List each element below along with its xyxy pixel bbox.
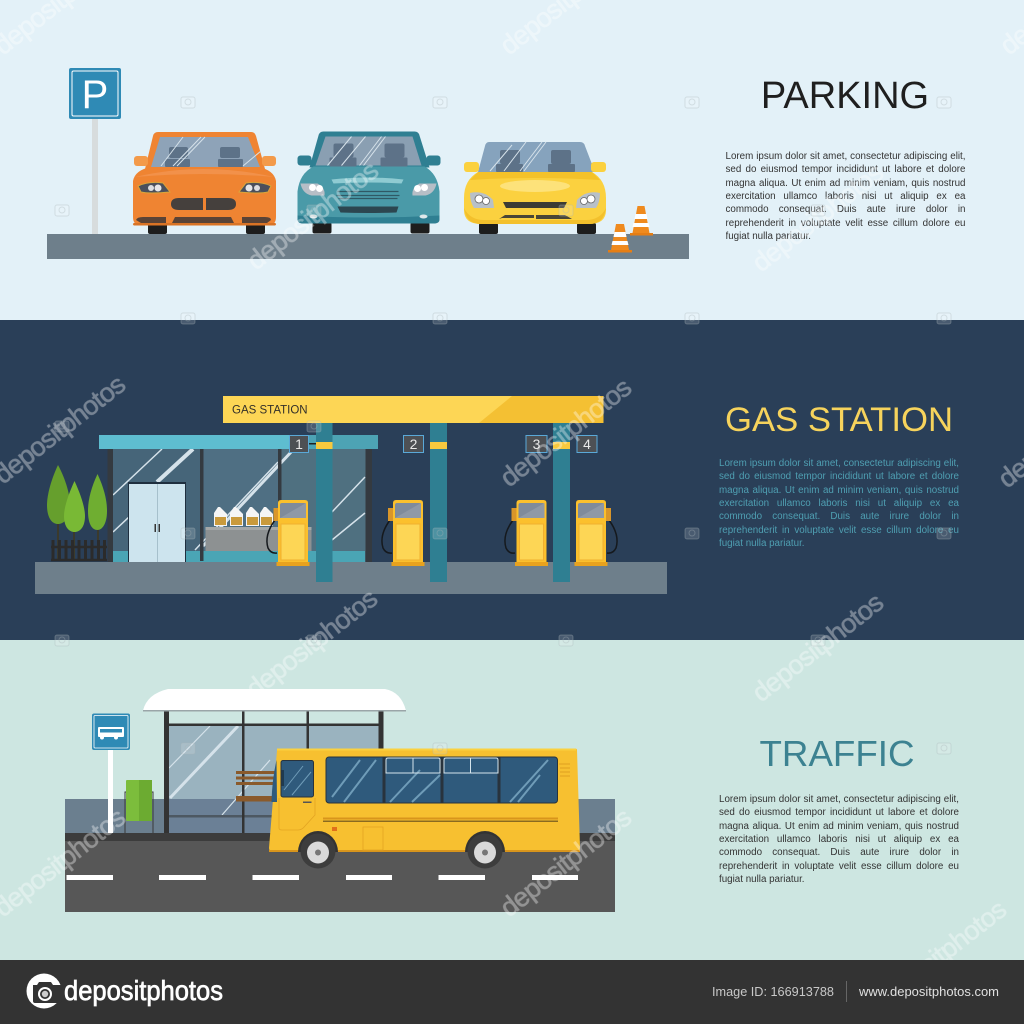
canopy sign <box>223 396 604 423</box>
icon: bus stop sign <box>92 714 130 833</box>
icon: shop building <box>99 435 378 562</box>
text block: traffic description: magna aliqua. Ut enim ad minim veniam, quis nostrud <box>719 821 959 832</box>
icon: green bin <box>125 780 153 833</box>
image id: Image ID: 166913788 <box>712 984 834 999</box>
watermarks: depositphotos <box>746 587 889 708</box>
text block: traffic description: reprehenderit in voluptate velit esse cillum dolore eu <box>719 861 959 872</box>
watermarks: depositphotos <box>746 157 889 278</box>
text block: traffic description <box>719 793 961 889</box>
text block: gas station description <box>719 457 961 553</box>
oil bottles <box>214 507 273 526</box>
pump number badges: 3 <box>533 436 541 452</box>
watermarks: depositphotos <box>241 155 384 276</box>
panel: parking <box>0 0 1024 320</box>
icon: orange car <box>133 132 276 234</box>
pump number badges <box>290 436 597 452</box>
watermark camera marks <box>55 97 951 754</box>
text block: parking description <box>726 150 968 246</box>
text block: parking description: fugiat nulla pariatur. <box>726 231 811 242</box>
text block: traffic description: sed do eiusmod tempor incididunt ut labore et dolore <box>719 807 959 818</box>
icon: traffic cones <box>608 206 653 252</box>
divider <box>846 981 847 1002</box>
text block: traffic description: exercitation ullamco laboris nisi ut aliquip ex ea <box>719 834 959 845</box>
icon: pump 4 <box>574 500 617 566</box>
icon: bus shelter <box>143 689 406 833</box>
text block: traffic description: fugiat nulla pariatur. <box>719 874 805 885</box>
icon: yellow car <box>464 142 606 234</box>
footer bar <box>0 960 1024 1024</box>
text block: parking description: Lorem ipsum dolor sit amet, consectetur adipiscing elit, <box>726 151 966 162</box>
wheels <box>298 831 505 868</box>
text block: gas station description: magna aliqua. Ut enim ad minim veniam, quis nostrud <box>719 485 959 496</box>
ground: station forecourt <box>35 562 667 594</box>
road: parking ground <box>47 234 689 259</box>
logo wordmark: depositphotos <box>64 975 223 1006</box>
icon: pump 2 <box>382 500 424 566</box>
text block: parking description: reprehenderit in voluptate velit esse cillum dolore eu <box>726 218 966 229</box>
watermarks: depositphotos <box>240 583 383 704</box>
pump number badges: 1 <box>295 436 303 452</box>
pump number badges: 2 <box>410 436 418 452</box>
panel: traffic <box>0 640 1024 960</box>
road with lane markings <box>65 833 615 912</box>
panel: gas station <box>0 320 1024 640</box>
canopy sign: GAS STATION <box>232 404 308 416</box>
icon: trees and fence <box>47 465 128 561</box>
sidewalk wall <box>65 799 615 833</box>
text block: traffic description: commodo consequat. Duis aute irure dolor in <box>719 847 959 858</box>
pump number badges: 4 <box>583 436 591 452</box>
text block: parking description: sed do eiusmod tempor incididunt ut labore et dolore <box>726 164 966 175</box>
heading: traffic: TRAFFIC <box>760 733 914 774</box>
text block: traffic description: Lorem ipsum dolor sit amet, consectetur adipiscing elit, <box>719 794 959 805</box>
icon: depositphotos camera logo <box>26 974 62 1008</box>
text block: gas station description: sed do eiusmod tempor incididunt ut labore et dolore <box>719 471 959 482</box>
text block: gas station description: fugiat nulla pariatur. <box>719 538 805 549</box>
text block: parking description: exercitation ullamco laboris nisi ut aliquip ex ea <box>726 191 966 202</box>
heading: parking: PARKING <box>761 75 929 117</box>
icon: parking sign <box>69 68 121 234</box>
text block: gas station description: commodo consequat. Duis aute irure dolor in <box>719 511 959 522</box>
icon: pump 1 <box>267 500 310 566</box>
heading: gas station: GAS STATION <box>725 401 953 439</box>
watermarks: depositphotos <box>494 372 637 493</box>
text block: gas station description: Lorem ipsum dolor sit amet, consectetur adipiscing elit, <box>719 458 959 469</box>
door <box>128 482 186 562</box>
icon: yellow bus <box>269 748 580 868</box>
icon: bench <box>236 771 276 802</box>
icon: pump 3 <box>505 500 548 566</box>
canopy columns <box>316 423 570 582</box>
watermarks: depositphotos <box>869 894 1012 1015</box>
icon: parking sign: P <box>82 73 108 117</box>
watermarks: depositphotos <box>494 802 637 923</box>
text block: parking description: commodo consequat. Duis aute irure dolor in <box>726 204 966 215</box>
text block: gas station description: reprehenderit in voluptate velit esse cillum dolore eu <box>719 525 959 536</box>
text block: gas station description: exercitation ullamco laboris nisi ut aliquip ex ea <box>719 498 959 509</box>
text block: parking description: magna aliqua. Ut enim ad minim veniam, quis nostrud <box>726 178 966 189</box>
website url: www.depositphotos.com <box>858 984 999 999</box>
icon: teal car <box>298 132 440 234</box>
